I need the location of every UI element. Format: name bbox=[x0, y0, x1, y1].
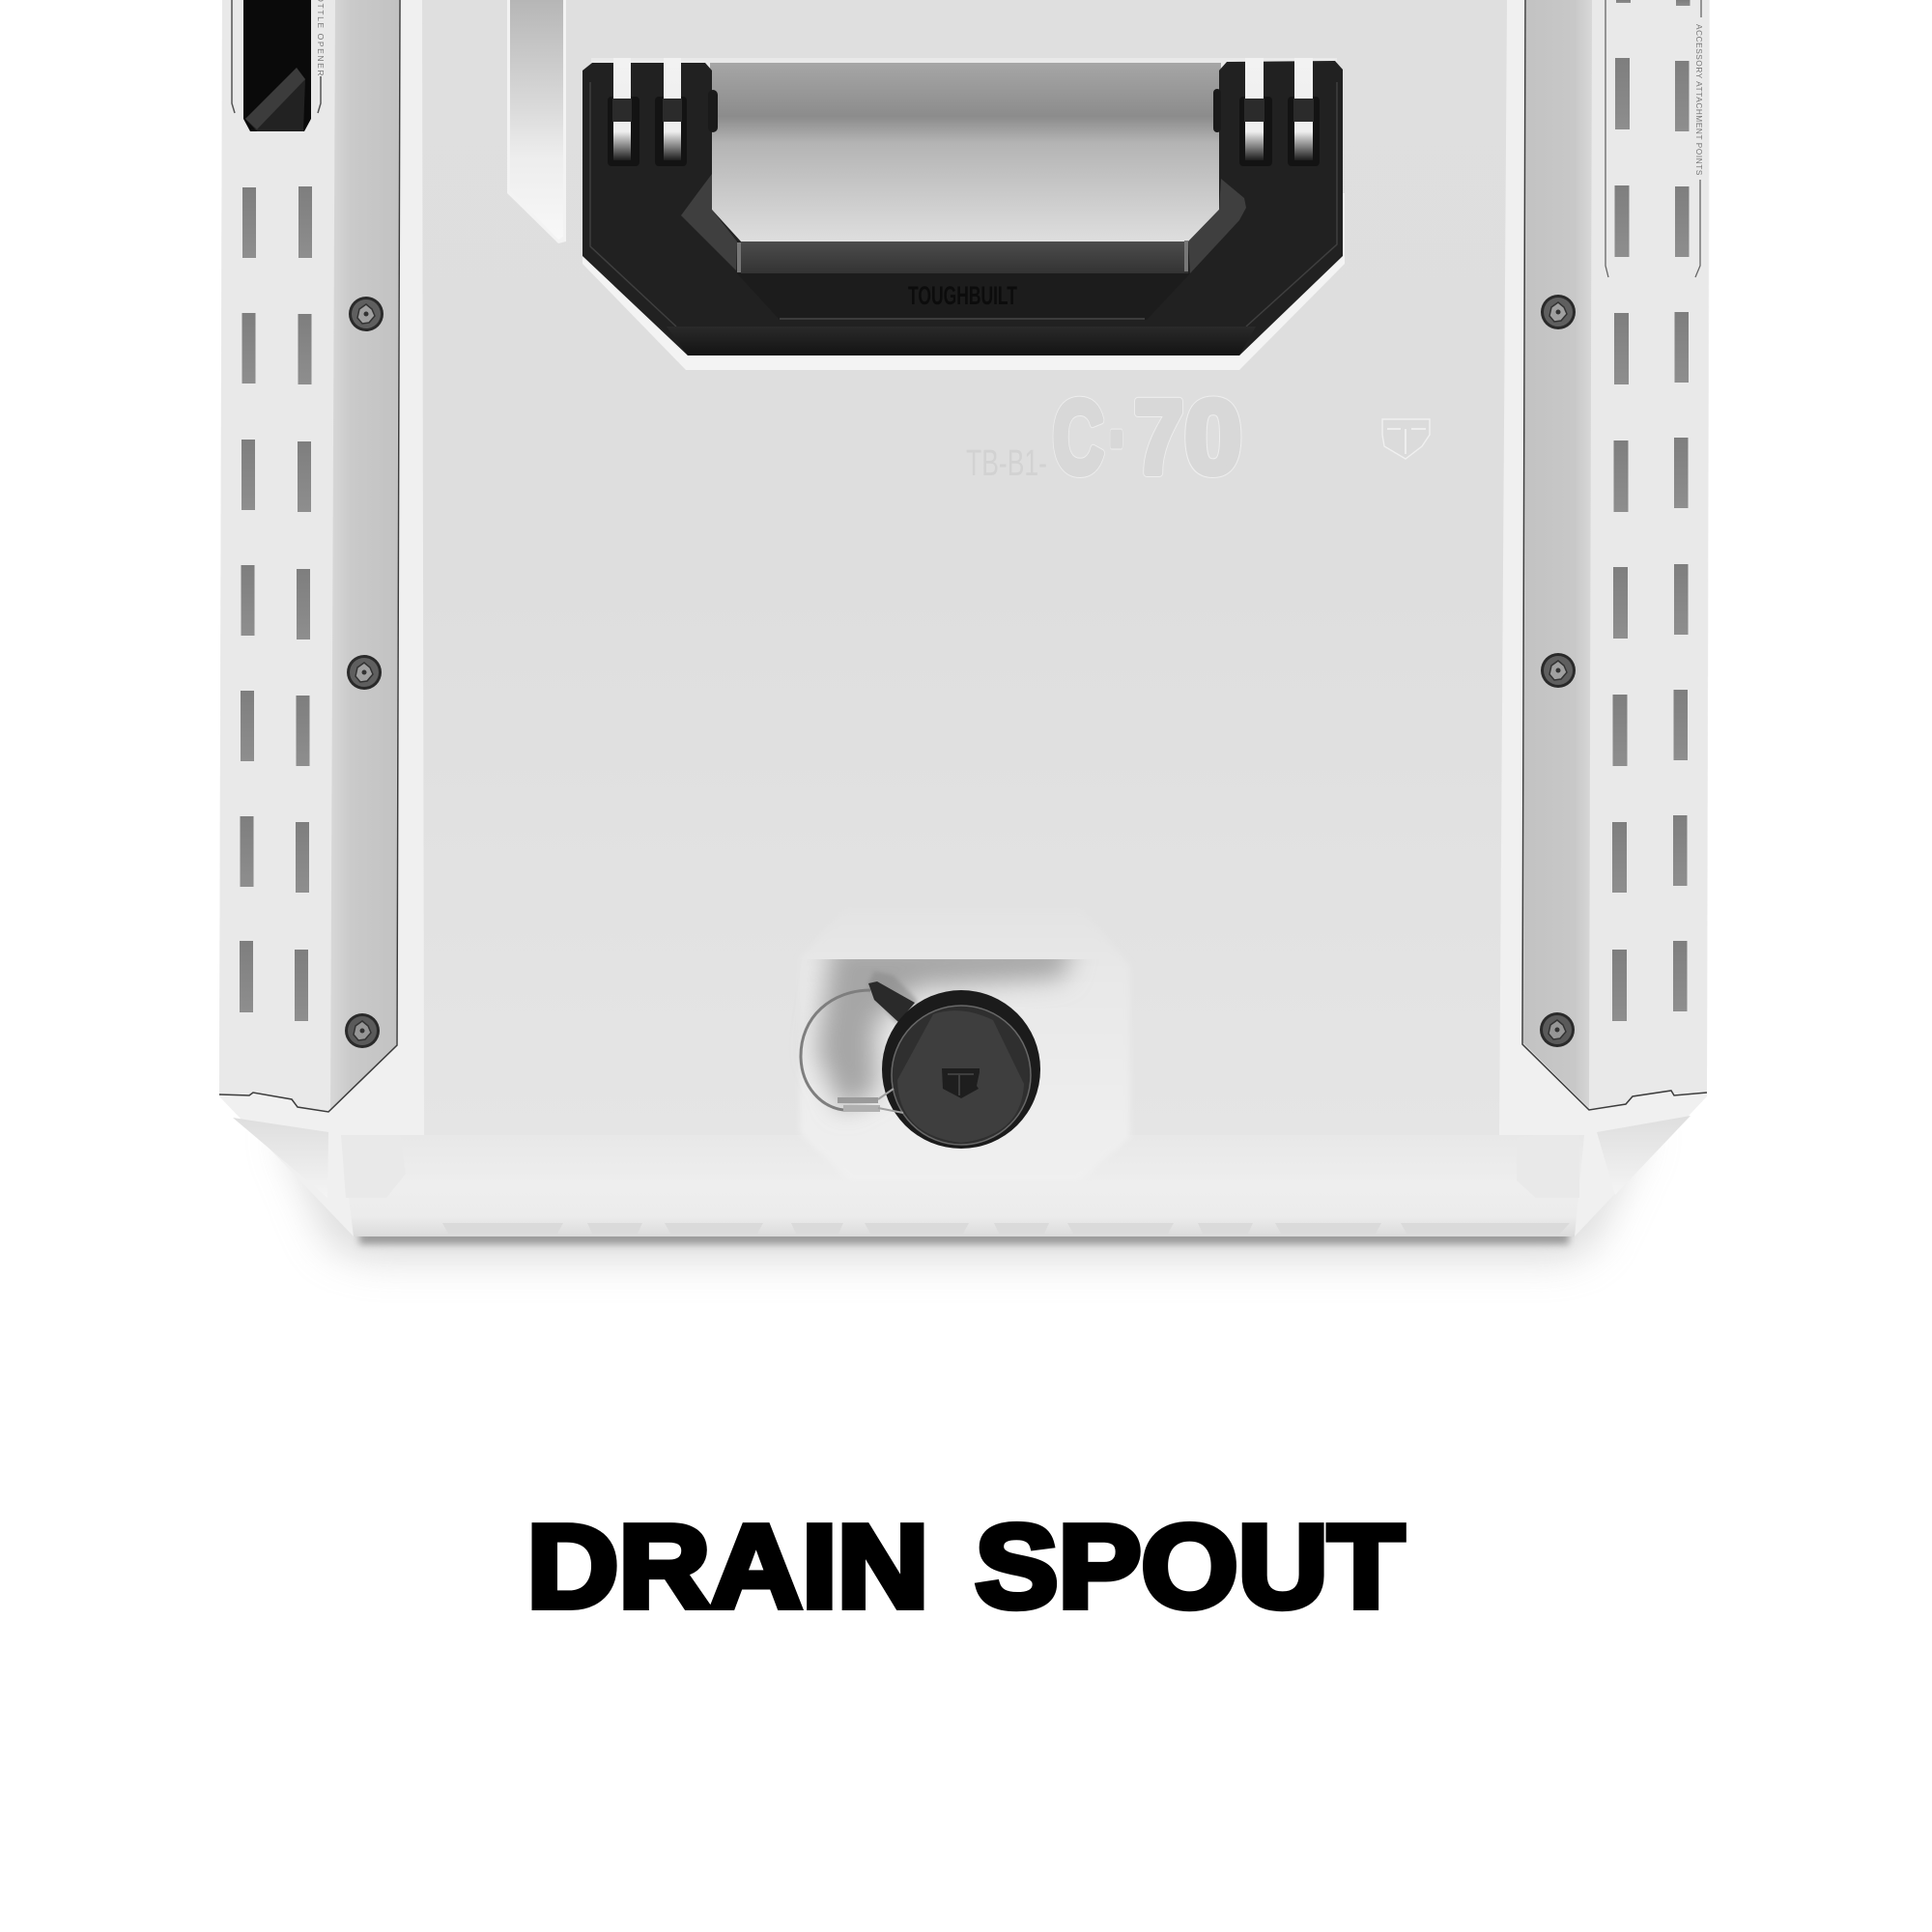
screw: left bottom bbox=[345, 1013, 380, 1048]
grip bar bbox=[741, 242, 1188, 273]
carry handle bbox=[582, 58, 1345, 370]
model prefix: TB-B1- bbox=[966, 443, 1047, 484]
handle recess top lip bbox=[591, 58, 1337, 68]
headline bbox=[527, 1501, 1405, 1633]
model number face: - bbox=[1110, 373, 1122, 489]
cap disc bbox=[892, 1006, 1031, 1145]
drain recess bbox=[803, 959, 1126, 1135]
cap raised tab bbox=[897, 1010, 1024, 1143]
model number highlight bbox=[1053, 373, 1241, 496]
bottle opener cut-out bbox=[243, 0, 311, 131]
bottle opener frame bbox=[232, 0, 321, 113]
model number face: 0 bbox=[1184, 379, 1241, 496]
screw: right middle bbox=[1541, 653, 1576, 688]
embossed logo bbox=[1382, 419, 1430, 459]
recess window bbox=[710, 63, 1221, 242]
left foot recess bbox=[341, 1135, 406, 1198]
tether tab shadow bbox=[867, 971, 918, 1024]
accessory attachment label: ACCESSORY ATTACHMENT POINTS bbox=[1694, 24, 1703, 176]
cap logo bbox=[942, 1068, 980, 1098]
bottle opener blade bbox=[245, 70, 305, 131]
embossed model number bbox=[966, 373, 1241, 496]
bottle opener blade edge bbox=[245, 68, 305, 129]
left corner facet bbox=[233, 1118, 328, 1198]
model number face bbox=[1053, 373, 1241, 496]
panel indent above handle bbox=[507, 0, 566, 243]
arm edge highlights bbox=[590, 82, 1337, 327]
grip lower panel bbox=[737, 273, 1190, 320]
right corner facet bbox=[1597, 1116, 1690, 1195]
grey inner face bbox=[1523, 0, 1592, 1108]
left side rail bbox=[219, 0, 400, 1112]
rail plate bbox=[219, 0, 399, 1111]
base tread marks bbox=[442, 1223, 1570, 1234]
grey inner face bbox=[330, 0, 399, 1110]
wire ferrule bbox=[838, 1089, 903, 1113]
model number highlight: 7 bbox=[1134, 380, 1183, 496]
attachment slots, right rail bbox=[1612, 0, 1690, 1021]
screw: left top bbox=[349, 297, 384, 331]
screw: left middle bbox=[347, 655, 382, 690]
handle brand mark: TOUGHBUILT bbox=[908, 281, 1017, 310]
right foot recess bbox=[1517, 1135, 1579, 1198]
rail seam bbox=[219, 0, 400, 1112]
rail plate bbox=[1523, 0, 1709, 1109]
front panel bbox=[422, 0, 1507, 1135]
recess outer shape bbox=[800, 908, 1130, 1181]
cooler body bbox=[219, 0, 1710, 1236]
tab clip bbox=[868, 981, 915, 1022]
groove line bbox=[780, 318, 1145, 320]
right hinge gaps bbox=[1239, 58, 1320, 166]
attachment label frame bbox=[1605, 0, 1701, 277]
lower band bbox=[667, 327, 1256, 355]
grip ferrules bbox=[737, 241, 1188, 272]
base ledge bbox=[341, 1135, 1584, 1236]
attachment slots, left rail bbox=[240, 186, 312, 1021]
model number highlight: C bbox=[1053, 378, 1104, 496]
model number face: 7 bbox=[1134, 380, 1183, 496]
drain spout cap bbox=[801, 971, 1040, 1149]
screw: right top bbox=[1541, 295, 1576, 329]
infographic canvas bbox=[219, 0, 1710, 1611]
body silhouette bbox=[219, 0, 1710, 1236]
model number face: C bbox=[1053, 378, 1104, 496]
headline word: drain: DRAIN bbox=[527, 1501, 929, 1633]
arm bevels bbox=[681, 174, 1246, 273]
model number highlight: 0 bbox=[1184, 379, 1241, 496]
headline word: spout: SPOUT bbox=[976, 1501, 1405, 1633]
hinge pin nubs bbox=[708, 89, 1221, 132]
screw: right bottom bbox=[1540, 1012, 1575, 1047]
left hinge gaps bbox=[608, 58, 687, 166]
tether wire ring bbox=[801, 990, 870, 1110]
right side rail bbox=[1522, 0, 1709, 1110]
model number highlight: - bbox=[1110, 373, 1122, 489]
recess shadows bbox=[817, 942, 1074, 1111]
floor shadow bbox=[280, 1130, 1647, 1261]
cap flange bbox=[882, 990, 1040, 1149]
rail seam bbox=[1522, 0, 1707, 1110]
handle arms bbox=[582, 61, 1343, 355]
handle recess lip bbox=[582, 193, 1345, 370]
